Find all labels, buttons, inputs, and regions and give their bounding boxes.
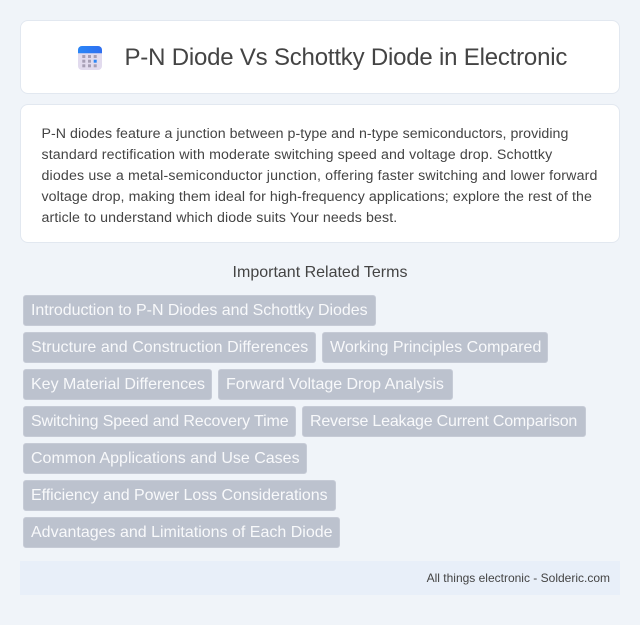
- footer credit: All things electronic - Solderic.com: [427, 571, 610, 585]
- tag list: Key Material Differences: [31, 376, 205, 393]
- header panel: [20, 20, 620, 94]
- tag list: Forward Voltage Drop Analysis: [226, 376, 444, 393]
- tag list: Structure and Construction Differences: [31, 339, 308, 356]
- tag list: Working Principles Compared: [330, 339, 541, 356]
- title: P-N Diode Vs Schottky Diode in Electronic: [124, 44, 567, 71]
- summary text: diodes use a metal-semiconductor junction, offering faster switching and lower forward: [42, 168, 598, 184]
- tag list: Switching Speed and Recovery Time: [31, 413, 289, 430]
- summary text: article to understand which diode suits Your needs best.: [42, 210, 397, 226]
- tag list: Efficiency and Power Loss Considerations: [31, 487, 328, 504]
- tag list: Common Applications and Use Cases: [31, 450, 300, 467]
- icon: calendar: [78, 46, 102, 70]
- summary text: standard rectification with moderate switching speed and voltage drop. Schottky: [42, 147, 552, 163]
- summary panel: [20, 104, 620, 243]
- heading: related terms: Important Related Terms: [233, 264, 407, 281]
- tag list: Advantages and Limitations of Each Diode: [31, 524, 333, 541]
- footer bar: [20, 561, 620, 595]
- summary text: voltage drop, making them ideal for high-frequency applications; explore the rest of the: [42, 189, 592, 205]
- summary text: [42, 126, 598, 226]
- tag list: Reverse Leakage Current Comparison: [310, 413, 577, 430]
- tag list: [23, 295, 586, 548]
- tag list: Introduction to P-N Diodes and Schottky Diodes: [31, 302, 368, 319]
- summary text: P-N diodes feature a junction between p-type and n-type semiconductors, providing: [42, 126, 568, 142]
